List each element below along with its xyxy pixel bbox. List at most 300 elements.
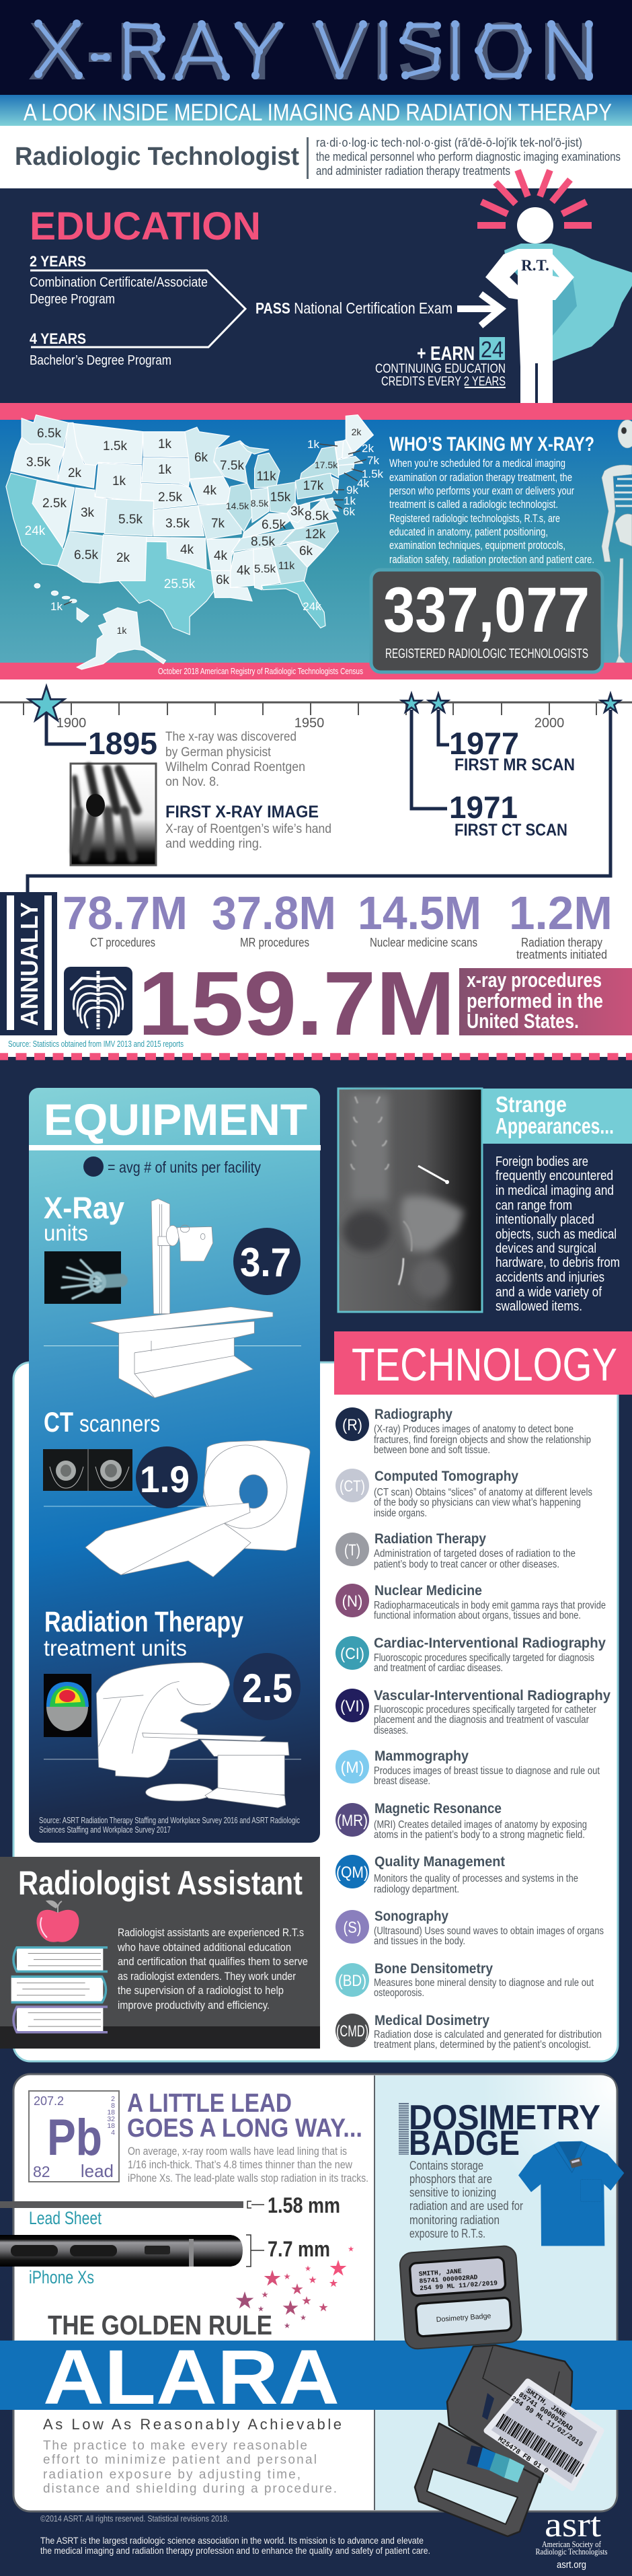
title: X-RAY VISION: O — [473, 5, 532, 97]
map leader lines — [64, 444, 366, 605]
procedure stats: Nuclear medicine scans — [370, 936, 477, 949]
lead text: 1/16 inch-thick. That’s 4.8 times thinner than the new — [128, 2158, 353, 2171]
logo: asrt: American Society of — [542, 2540, 602, 2549]
item: magnetic resonance: (MRI) Creates detailed images of anatomy by exposing — [374, 1819, 587, 1831]
map state values: 8.5k — [251, 535, 275, 549]
logo: asrt — [535, 2506, 608, 2571]
timeline stars — [28, 686, 620, 721]
x-ray value: 3.7 — [240, 1240, 291, 1285]
map state values: 1k — [344, 494, 356, 507]
radiologist assistant text — [117, 1927, 308, 2012]
item: quality management: radiology department. — [374, 1884, 459, 1895]
element tile: lead: 82 — [33, 2163, 50, 2180]
icon: rib cage — [64, 967, 132, 1035]
1895 milestone: X-ray of Roentgen’s wife’s hand — [165, 822, 331, 836]
item: bone densitometry — [335, 1961, 594, 1999]
lead text: On average, x-ray room walls have lead lining that is — [128, 2145, 347, 2158]
1971 milestone: FIRST CT SCAN — [455, 821, 567, 840]
map state values: 1k — [158, 463, 172, 477]
map state values: 6k — [343, 505, 355, 518]
procedure stats: 1.2M — [509, 887, 613, 939]
strange appearances text: and a wide variety of — [496, 1285, 602, 1300]
definition text: and administer radiation therapy treatments — [316, 164, 510, 178]
map state values: 5.5k — [118, 513, 143, 527]
alara definition: effort to minimize patient and personal — [43, 2453, 317, 2467]
term heading: Radiologic Technologist — [15, 143, 299, 171]
equipment legend: = avg # of units per facility — [108, 1158, 261, 1176]
procedure stats: 78.7M — [63, 887, 188, 939]
continuing education: CREDITS EVERY 2 YEARS — [381, 375, 506, 389]
item: magnetic resonance: Magnetic Resonance — [374, 1801, 502, 1816]
item: quality management: Quality Management — [374, 1854, 505, 1870]
map state values: 3.5k — [165, 517, 190, 531]
item: nuclear medicine — [335, 1583, 606, 1621]
dosimetry paragraph — [409, 2159, 523, 2240]
continuing education — [375, 337, 506, 389]
x-ray value — [233, 1228, 301, 1295]
logo: asrt: Radiologic Technologists — [535, 2547, 608, 2556]
timeline axis — [0, 702, 632, 715]
item: magnetic resonance — [335, 1801, 587, 1841]
image: radiation dose map — [44, 1674, 91, 1737]
badge card: 85741 000002RAD — [517, 2391, 574, 2433]
annually tab — [0, 892, 57, 1035]
equipment source — [39, 1815, 300, 1835]
stars — [236, 2246, 354, 2328]
alara definition: distance and shielding during a procedure. — [43, 2482, 337, 2496]
item: vascular-interventional radiography: placement and the diagnosis and treatment of vascular — [374, 1714, 589, 1726]
strange appearances text: accidents and injuries — [496, 1270, 604, 1285]
radiologist assistant text: and certification that qualifies them to serve — [118, 1956, 308, 1968]
item: radiography: (X-ray) Produces images of anatomy to detect bone — [374, 1424, 574, 1435]
item: radiography: between bone and soft tissue. — [374, 1444, 490, 1456]
map state values: 1k — [307, 438, 319, 451]
item: computed tomography: (CT) — [340, 1477, 365, 1496]
radiation therapy heading — [44, 1606, 243, 1660]
procedure stats: Radiation therapy — [521, 936, 602, 949]
title: X-RAY VISION: I — [446, 5, 465, 97]
iphone comparison — [0, 2235, 330, 2287]
strange appearances text: can range from — [496, 1198, 572, 1213]
equipment source: Sciences Staffing and Workplace Survey 2017 — [39, 1825, 171, 1835]
who's taking my x-ray text — [389, 433, 594, 566]
title: X-RAY VISION: Y — [232, 5, 286, 97]
who's taking my x-ray text: treatment is called a radiologic technologist. — [389, 498, 558, 511]
image: ct scans — [43, 1449, 132, 1491]
footer: ©2014 ASRT. All rights reserved. Statistical revisions 2018. — [40, 2513, 229, 2524]
equipment legend — [83, 1156, 261, 1177]
item: sonography: Sonography — [374, 1909, 448, 1924]
procedure stats: MR procedures — [240, 936, 309, 949]
continuing education: CONTINUING EDUCATION — [375, 362, 506, 376]
statistics source: Source: Statistics obtained from IMV 2013 and 2015 reports — [8, 1039, 184, 1049]
who's taking my x-ray text: person who performs your exam or delivers your — [389, 484, 574, 497]
strange appearances text: frequently encountered — [496, 1169, 613, 1183]
title: X-RAY VISION — [28, 5, 598, 97]
map state values: 2.5k — [158, 490, 182, 505]
1895 milestone: on Nov. 8. — [165, 775, 219, 789]
who's taking my x-ray text: Registered radiologic technologists, R.T.s, are — [389, 512, 560, 525]
dosimetry badge text — [403, 2098, 600, 2240]
map state values: 1k — [112, 474, 126, 488]
map state values: 4k — [203, 484, 217, 498]
image: hand x-ray — [44, 1251, 121, 1304]
stat box: 337,077 — [371, 570, 602, 672]
header: title band — [0, 0, 632, 97]
education pathways: Combination Certificate/Associate — [30, 275, 208, 290]
procedure stats — [63, 887, 613, 961]
item: vascular-interventional radiography — [335, 1688, 610, 1736]
title: X-RAY VISION: I — [373, 5, 392, 97]
image: abdominal x-ray with nail — [338, 1089, 482, 1312]
item: nuclear medicine: Nuclear Medicine — [374, 1583, 482, 1598]
element tile: lead: 207.2 — [34, 2094, 64, 2108]
stat box: 337,077: 337,077 — [383, 575, 590, 646]
map state values: 3k — [290, 505, 305, 519]
image: x-ray machine — [89, 1199, 273, 1398]
equipment source: Source: ASRT Radiation Therapy Staffing and Workplace Survey 2016 and ASRT Radiologic — [39, 1815, 300, 1825]
map state values: 1k — [158, 437, 172, 451]
element tile: lead: 2 — [111, 2095, 115, 2103]
item: medical dosimetry — [335, 2013, 602, 2051]
iphone comparison: 7.7 mm — [268, 2237, 330, 2261]
radiation value: 2.5 — [242, 1666, 292, 1711]
timeline year labels: 2000 — [535, 716, 564, 731]
alara definition — [43, 2416, 342, 2496]
icon: badge front: Dosimetry Badge — [436, 2312, 491, 2324]
strange appearances text — [496, 1154, 620, 1314]
item: radiation therapy: patient’s body to treat cancer or other diseases. — [374, 1559, 559, 1570]
title: X-RAY VISION: S — [398, 5, 444, 97]
map state values: 6k — [216, 573, 230, 587]
panel: radiologist assistant — [0, 1857, 320, 2049]
panel: white technology card — [13, 1362, 618, 2061]
1895 milestone: The x-ray was discovered — [165, 730, 297, 744]
panel: equipment — [29, 1088, 321, 1843]
procedure stats: 14.5M — [358, 887, 481, 939]
x-ray units heading — [44, 1191, 124, 1245]
who's taking my x-ray text: When you’re scheduled for a medical imaging — [389, 457, 565, 470]
dosimetry heading: DOSIMETRY — [409, 2098, 600, 2137]
icon: scrub shirt — [518, 2141, 624, 2246]
item: radiography: fractures, find foreign objects and show the relationship — [374, 1434, 591, 1446]
icon: badge front: 85741 000002RAD — [419, 2273, 478, 2285]
pink divider — [0, 403, 632, 420]
band: ALARA: ALARA — [43, 2334, 340, 2421]
logo: asrt: asrt.org — [557, 2559, 586, 2571]
radiologist assistant text: improve productivity and efficiency. — [118, 1999, 270, 2012]
title: X-RAY VISION: N — [540, 5, 598, 97]
map state values: 25.5k — [164, 577, 196, 591]
item: sonography — [335, 1909, 604, 1947]
panel: lead and dosimetry card — [13, 2074, 617, 2511]
strange appearances text: intentionally placed — [496, 1212, 594, 1227]
1977 milestone: FIRST MR SCAN — [455, 756, 575, 774]
icon: badge front: SMITH, JANE — [419, 2267, 462, 2278]
x-ray units heading: units — [44, 1220, 88, 1245]
definition text — [316, 136, 621, 178]
ct scanners heading — [44, 1406, 160, 1438]
lead sheet comparison: 1.58 mm — [268, 2193, 340, 2217]
image: radiation therapy machine — [96, 1662, 289, 1808]
map state values: 4k — [237, 564, 251, 578]
map state values: 7k — [367, 454, 379, 467]
item: computed tomography — [335, 1469, 592, 1519]
big stat: 159.7M: 159.7M — [138, 953, 455, 1054]
map state values: 6k — [299, 544, 313, 558]
item: cardiac-interventional radiography — [335, 1635, 606, 1674]
badge card: SMITH, JANE — [524, 2387, 567, 2420]
1971 milestone: 1971 — [449, 790, 518, 825]
lead heading — [127, 2089, 362, 2143]
map state values: 2k — [362, 442, 374, 455]
radiologist assistant text: who have obtained additional education — [117, 1942, 291, 1954]
item: magnetic resonance: atoms in the patient’s body to a strong magnetic field. — [374, 1829, 585, 1841]
1971 milestone — [449, 790, 567, 840]
dosimetry paragraph: phosphors that are — [409, 2172, 492, 2186]
1977 milestone: 1977 — [449, 726, 519, 761]
strange appearances heading — [483, 1089, 632, 1144]
map state values: 7k — [211, 517, 225, 531]
badge card — [487, 2382, 601, 2488]
dosimetry paragraph: sensitive to ionizing — [409, 2186, 496, 2199]
item: cardiac-interventional radiography: Cardiac-Interventional Radiography — [374, 1635, 606, 1651]
map state values: 14.5k — [226, 501, 249, 511]
item: nuclear medicine: (N) — [342, 1592, 363, 1611]
footer — [40, 2506, 608, 2571]
timeline year labels — [56, 716, 564, 731]
radiation therapy heading: treatment units — [44, 1635, 187, 1660]
map state values: 12k — [305, 527, 326, 542]
radiologist assistant text: the supervision of a radiologist to help — [118, 1985, 284, 1997]
item: sonography: and tissues in the body. — [374, 1936, 465, 1947]
ct scanners heading: scanners — [79, 1411, 160, 1437]
annually tab: ANNUALLY — [15, 902, 43, 1026]
map state values: 4k — [180, 543, 194, 557]
1895 milestone: Wilhelm Conrad Roentgen — [165, 760, 305, 774]
definition text: ra·di·o·log·ic tech·nol·o·gist (rā′dē-ō-loj′ik tek-nol′ō-jist) — [316, 136, 582, 149]
radiation value — [233, 1653, 301, 1720]
lead text — [128, 2145, 368, 2184]
x-ray procedures band — [459, 968, 632, 1035]
item: radiation therapy: (T) — [344, 1541, 360, 1559]
radiologist assistant text: as radiologist extenders. They work under — [118, 1971, 296, 1983]
map state values: 2.5k — [42, 496, 67, 511]
item: medical dosimetry: (CMD) — [336, 2022, 368, 2040]
iphone comparison: iPhone Xs — [29, 2267, 94, 2287]
item: radiography: Radiography — [374, 1407, 452, 1422]
equipment heading: EQUIPMENT — [44, 1095, 307, 1144]
lead text: iPhone Xs. The lead-plate walls stop radiation in its tracks. — [128, 2172, 368, 2184]
strange appearances text: devices and surgical — [496, 1241, 596, 1256]
item: computed tomography: (CT scan) Obtains “slices” of anatomy at different levels — [374, 1487, 592, 1498]
element tile: lead: 18 — [107, 2122, 115, 2130]
icon: ruler ticks — [399, 2103, 409, 2155]
strange appearances heading: Strange — [496, 1092, 567, 1117]
map state values — [25, 427, 384, 636]
item: radiography: (R) — [342, 1416, 362, 1434]
us map — [6, 415, 373, 669]
ct value — [136, 1446, 198, 1508]
continuing education: 24 — [481, 337, 504, 363]
map state values: 2k — [116, 551, 130, 565]
map state values: 11k — [278, 560, 295, 572]
footer: The ASRT is the largest radiologic science association in the world. Its mission is to advance and elevate — [40, 2535, 424, 2546]
item: quality management — [335, 1854, 578, 1895]
timeline year labels: 1950 — [294, 716, 324, 731]
1895 milestone: 1895 — [88, 726, 157, 761]
pink census strip — [0, 663, 632, 679]
x-ray procedures band: performed in the — [467, 989, 603, 1013]
dosimetry paragraph: monitoring radiation — [409, 2213, 500, 2227]
x-ray procedures band: United States. — [467, 1009, 579, 1033]
map state values: 6.5k — [262, 518, 286, 532]
image: first x-ray of a hand — [71, 764, 156, 865]
panel: education — [0, 170, 632, 403]
map state values: 1k — [50, 600, 63, 613]
item: vascular-interventional radiography: diseases. — [374, 1725, 408, 1736]
map state values: 15k — [270, 490, 291, 505]
icon: badge front — [399, 2245, 522, 2350]
bone letters — [38, 24, 589, 77]
item: bone densitometry: osteoporosis. — [374, 1987, 424, 1999]
strange appearances text: swallowed items. — [496, 1299, 582, 1314]
item: quality management: Monitors the quality of processes and systems in the — [374, 1873, 578, 1884]
item: vascular-interventional radiography: (VI) — [340, 1697, 364, 1716]
education pathways — [30, 253, 245, 368]
census source: October 2018 American Registry of Radiologic Technologists Census — [158, 666, 363, 676]
1895 milestone: and wedding ring. — [165, 837, 262, 851]
item: sonography: (S) — [343, 1919, 362, 1937]
title: X-RAY VISION: R — [117, 5, 167, 97]
logo: asrt: asrt — [545, 2506, 602, 2544]
map state values: 17k — [303, 479, 324, 493]
timeline connectors — [28, 710, 610, 893]
radiologist assistant text: Radiologist assistants are experienced R.T.s — [118, 1927, 304, 1939]
item: medical dosimetry: Medical Dosimetry — [374, 2013, 489, 2028]
map state values: 7.5k — [220, 459, 244, 473]
footer: the medical imaging and radiation therapy profession and to enhance the quality and safety of patient care. — [40, 2545, 430, 2556]
item: magnetic resonance: (MR) — [337, 1812, 368, 1830]
element tile: lead: 8 — [111, 2102, 115, 2110]
icon: apple on books — [11, 1901, 108, 2032]
radiologist assistant heading: Radiologist Assistant — [18, 1864, 303, 1902]
map state values: 24k — [303, 600, 321, 613]
education pathways: Bachelor’s Degree Program — [30, 353, 171, 368]
item: radiography — [335, 1407, 591, 1456]
map state values: 3.5k — [26, 455, 50, 470]
map state values: 1.5k — [362, 468, 384, 480]
icon: skeleton — [602, 420, 632, 663]
timeline year labels: 1900 — [56, 716, 86, 731]
map state values: 2k — [352, 427, 362, 437]
who's taking my x-ray text: educated in anatomy, patient positioning, — [389, 525, 548, 538]
education pathways: Degree Program — [30, 292, 115, 307]
item: radiation therapy — [335, 1531, 576, 1570]
item: vascular-interventional radiography: Vascular-Interventional Radiography — [374, 1688, 610, 1703]
figure: R.T. superhero — [477, 170, 632, 403]
map state values: 3k — [81, 506, 95, 520]
map state values: 6.5k — [74, 548, 98, 562]
item: mammography: breast disease. — [374, 1775, 430, 1787]
figure: R.T. superhero: R.T. — [521, 257, 549, 274]
map state values: 9k — [346, 484, 358, 496]
map state values: 1k — [117, 625, 127, 636]
band: ALARA — [0, 2334, 632, 2421]
1895 milestone: FIRST X-RAY IMAGE — [165, 803, 319, 821]
element tile: lead — [29, 2091, 119, 2182]
alara definition: The practice to make every reasonable — [43, 2439, 307, 2453]
item: bone densitometry: (BD) — [338, 1972, 366, 1990]
map state values: 5.5k — [254, 562, 276, 575]
pass exam text: PASS National Certification Exam — [255, 299, 452, 317]
item: radiation therapy: Radiation Therapy — [374, 1531, 486, 1547]
item: vascular-interventional radiography: Fluoroscopic procedures specifically targeted for catheter — [374, 1704, 596, 1716]
title: X-RAY VISION: V — [311, 5, 370, 97]
element tile: lead: 4 — [111, 2129, 115, 2137]
radiation therapy heading: Radiation Therapy — [44, 1606, 243, 1638]
lead sheet comparison — [0, 2193, 340, 2228]
map state values: 6k — [194, 451, 208, 465]
element tile: lead: 32 — [107, 2115, 115, 2123]
map state values: 6.5k — [37, 427, 61, 441]
1977 milestone — [449, 726, 575, 774]
item: nuclear medicine: functional information about organs, tissues and bone. — [374, 1610, 581, 1621]
1895 milestone — [71, 726, 331, 865]
dosimetry paragraph: exposure to R.T.s. — [409, 2227, 485, 2240]
item: quality management: (QM) — [336, 1864, 368, 1882]
strange appearances text: Foreign bodies are — [496, 1154, 588, 1169]
item: computed tomography: of the body so physicians can view what’s happening — [374, 1497, 581, 1508]
panel: strange appearances — [338, 1089, 632, 1314]
lead sheet comparison: Lead Sheet — [29, 2208, 102, 2228]
badge card: M25478 FB 01 0 — [496, 2435, 550, 2476]
dosimetry heading: BADGE — [409, 2124, 520, 2163]
map state values: 8.5k — [305, 509, 329, 523]
panel: who's taking my x-ray — [0, 415, 632, 679]
map state values: 8.5k — [251, 498, 269, 509]
item: bone densitometry: Measures bone mineral density to diagnose and rule out — [374, 1977, 594, 1989]
item: mammography: Mammography — [374, 1749, 469, 1764]
education pathways: 2 YEARS — [30, 253, 86, 270]
image: ct scanner — [85, 1440, 310, 1577]
x-ray procedures band: x-ray procedures — [467, 968, 602, 992]
definition band — [0, 126, 632, 188]
map state values: 1.5k — [103, 439, 127, 453]
who's taking my x-ray text: examination or radiation therapy treatment, the — [389, 471, 572, 484]
element tile: lead: Pb — [47, 2109, 102, 2166]
golden rule heading: THE GOLDEN RULE — [48, 2310, 272, 2341]
dosimetry paragraph: radiation and are used for — [409, 2199, 523, 2213]
panel: timeline — [0, 679, 632, 1058]
map state values: 24k — [25, 524, 46, 538]
element tile: lead: 18 — [107, 2108, 115, 2117]
ct scanners heading: CT — [44, 1406, 73, 1438]
item: mammography: (M) — [340, 1759, 364, 1777]
x-ray units heading: X-Ray — [44, 1191, 124, 1225]
item: cardiac-interventional radiography: and treatment of cardiac diseases. — [374, 1662, 503, 1674]
dosimetry heading — [409, 2098, 600, 2163]
item: medical dosimetry: treatment plans, determined by the patient’s oncologist. — [374, 2039, 591, 2051]
title: X-RAY VISION: A — [169, 5, 232, 97]
ct value: 1.9 — [140, 1458, 190, 1500]
element tile: lead: lead — [81, 2161, 114, 2181]
strange appearances text: in medical imaging and — [496, 1183, 614, 1198]
map state values: 4k — [357, 477, 369, 490]
map state values: 2k — [68, 466, 82, 480]
continuing education: + EARN — [417, 343, 475, 365]
lead heading: GOES A LONG WAY... — [127, 2114, 362, 2143]
